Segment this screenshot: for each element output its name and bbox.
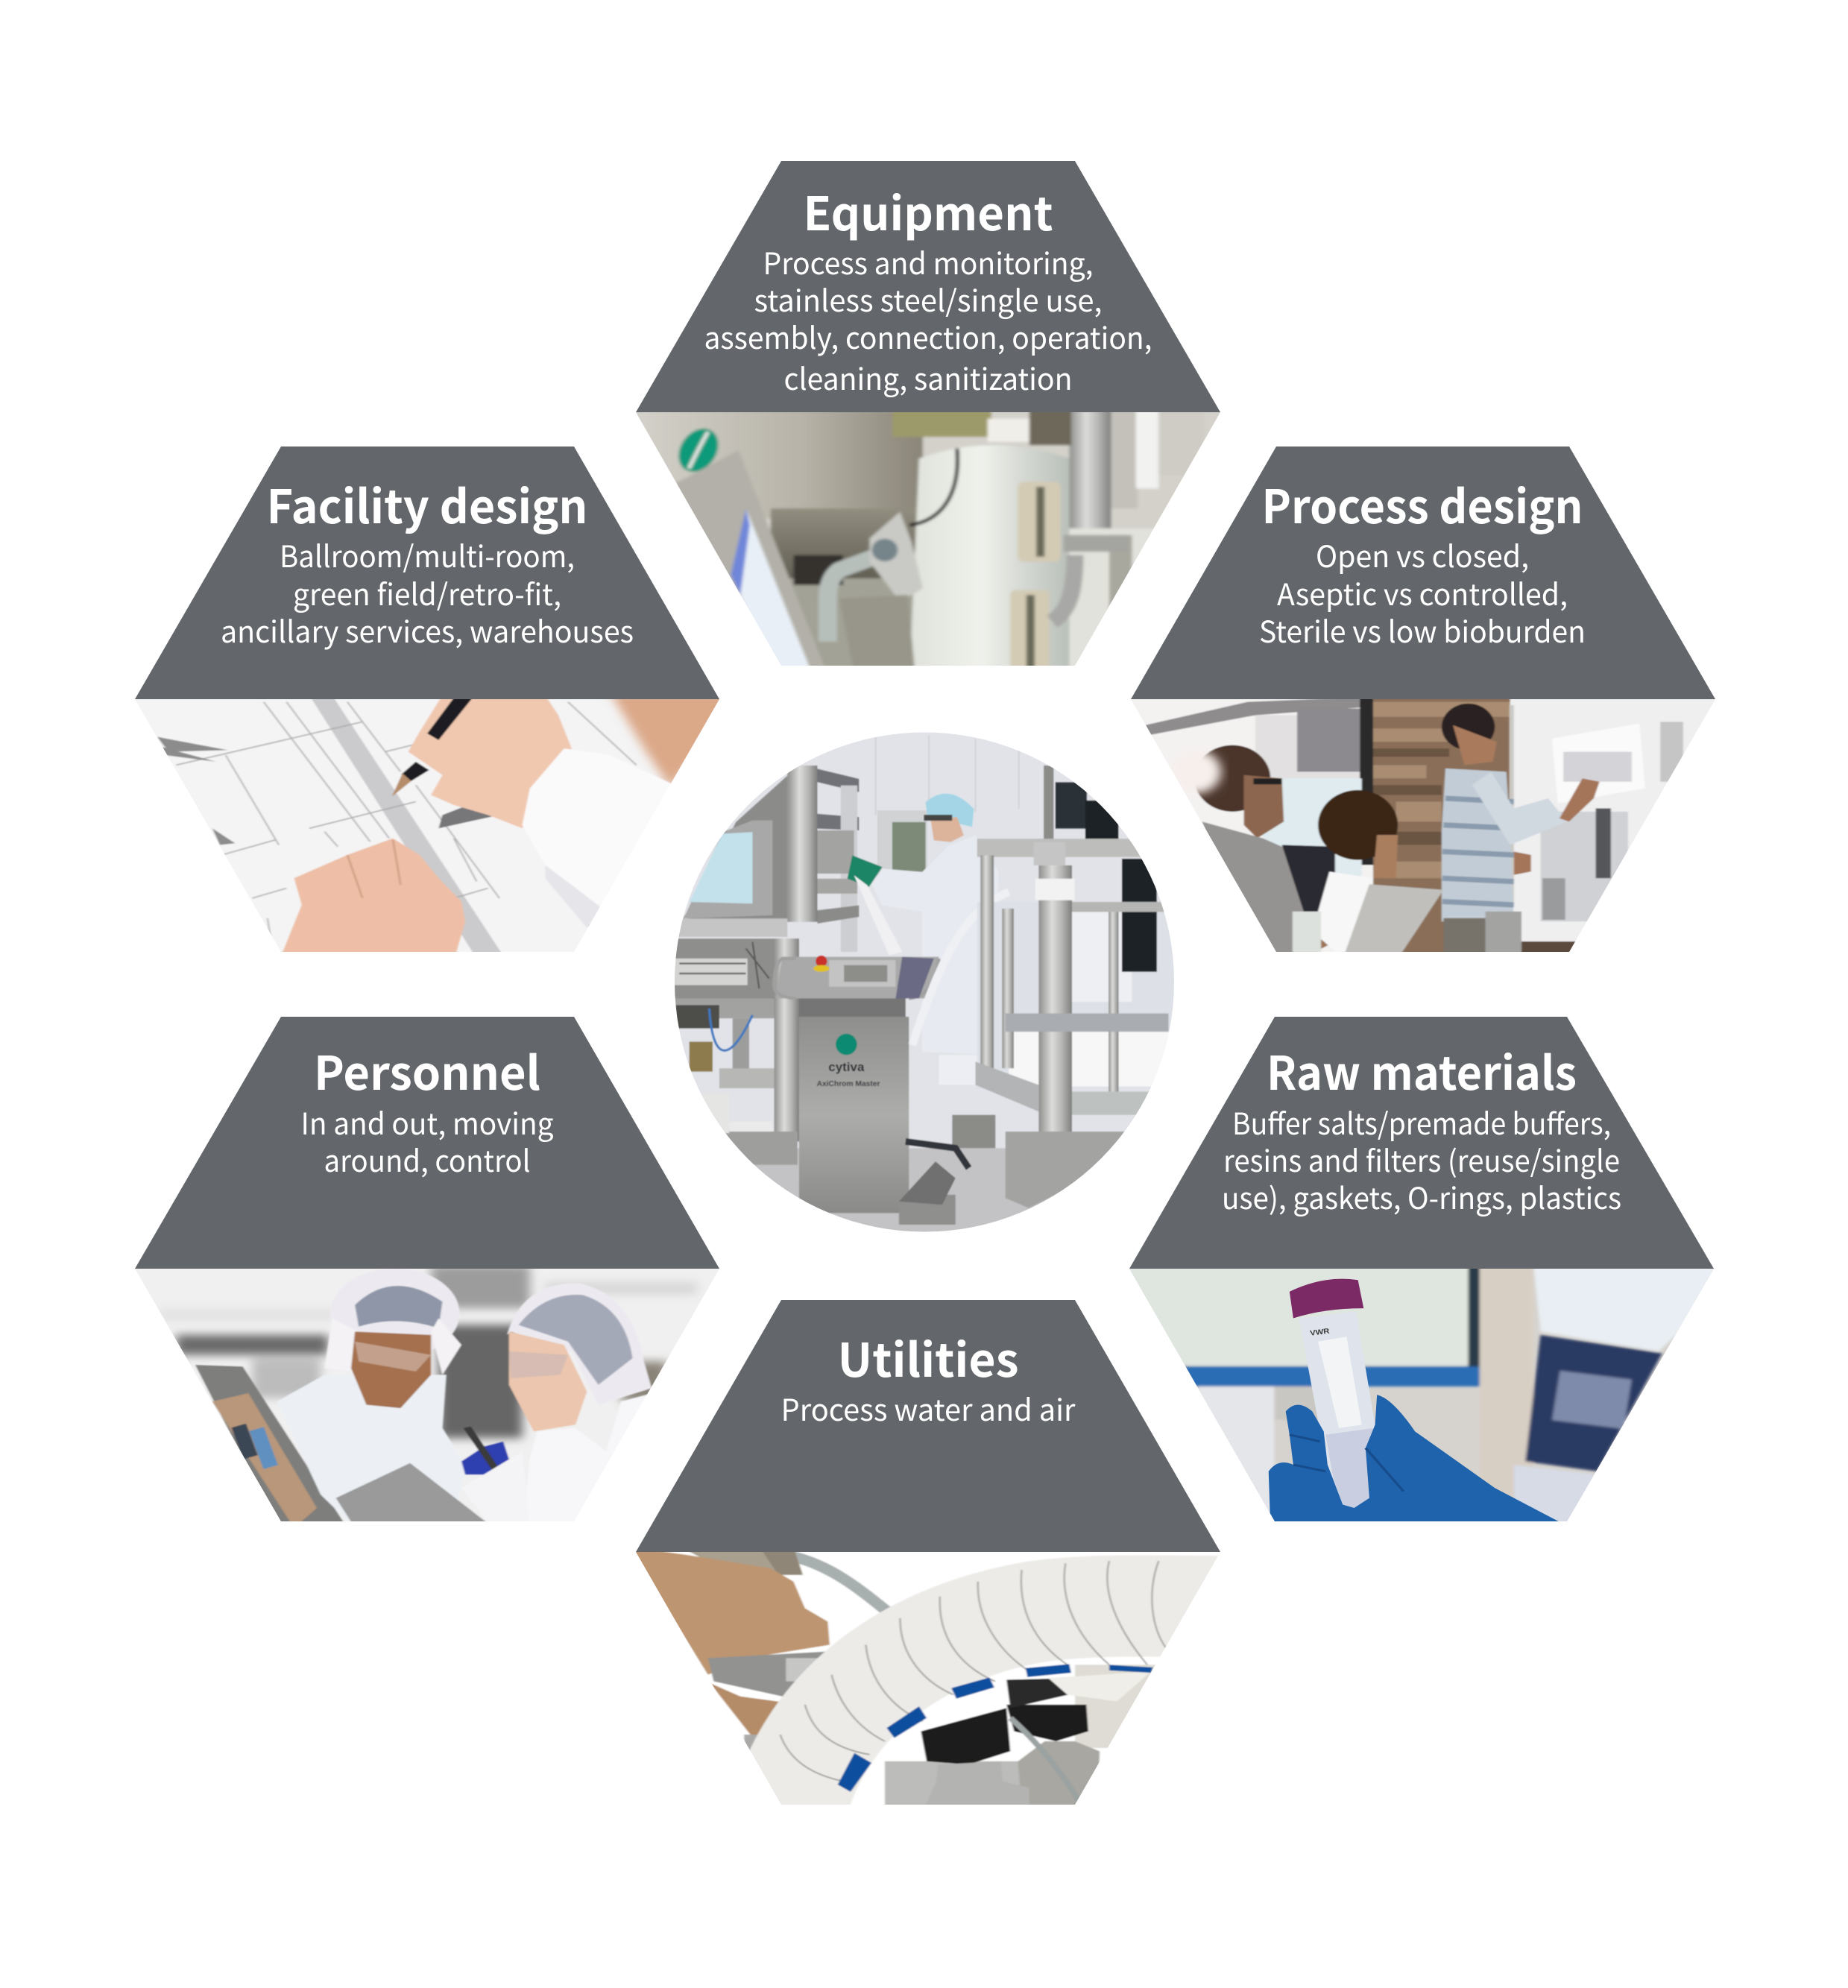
header hexagon: Facility design — [135, 446, 719, 699]
panel: Raw materials — [1103, 1017, 1727, 1528]
heading: Equipment: Equipment — [804, 177, 1053, 244]
text block: Personnel description — [301, 1100, 553, 1181]
photo: gloved hand holding sample tube — [1103, 1262, 1727, 1528]
text block: Process design description: Open vs closed, — [1316, 533, 1529, 576]
logo: cytiva on skid — [836, 1034, 857, 1055]
text block: Raw materials description: use), gaskets, O-rings, plastics — [1222, 1175, 1621, 1218]
photo: hands drawing on blueprint — [136, 699, 719, 952]
text block: Equipment description: stainless steel/single use, — [754, 277, 1102, 321]
text block: Personnel description: In and out, moving — [301, 1100, 553, 1143]
header hexagon: Utilities — [636, 1300, 1220, 1552]
text block: Utilities description: Process water and air — [781, 1386, 1076, 1430]
heading: Process design: Process design — [1261, 470, 1583, 537]
text block: Equipment description: Process and monitoring, — [763, 240, 1093, 283]
text block: Personnel description: around, control — [324, 1137, 531, 1181]
photo: two technicians in clean-room gowns — [135, 1269, 719, 1521]
text block: Raw materials description — [1222, 1100, 1621, 1218]
header hexagon: Raw materials — [1129, 1017, 1714, 1269]
photo: hand connecting white hose — [636, 1552, 1218, 1805]
tube label text: VWR — [1310, 1327, 1331, 1338]
central photo: technician at AxiChrom column: AxiChrom Master — [817, 1080, 880, 1088]
text block: Facility design description: Ballroom/multi-room, — [280, 533, 575, 576]
text block: Facility design description: green field/retro-fit, — [293, 571, 561, 614]
central photo: technician at AxiChrom column: cytiva — [828, 1060, 865, 1074]
panel: Personnel — [119, 1017, 735, 1531]
heading: Personnel: Personnel — [314, 1036, 540, 1103]
photo: chromatography equipment close-up — [636, 412, 1220, 666]
photo: team meeting at whiteboard — [1131, 699, 1715, 952]
header hexagon: Process design — [1131, 446, 1715, 699]
text block: Equipment description — [704, 240, 1152, 399]
header hexagon: Personnel — [135, 1017, 719, 1269]
heading: Facility design: Facility design — [267, 470, 587, 537]
text block: Process design description — [1259, 533, 1586, 651]
panel: Facility design — [119, 446, 735, 962]
text block: Equipment description: assembly, connection, operation, — [704, 315, 1152, 358]
text block: Process design description: Aseptic vs controlled, — [1277, 571, 1568, 614]
panel: Central photo of chromatography system — [675, 732, 1174, 1231]
text block: Equipment description: cleaning, sanitization — [784, 356, 1072, 399]
heading: Utilities: Utilities — [838, 1323, 1018, 1390]
text block: Raw materials description: Buffer salts/premade buffers, — [1232, 1100, 1611, 1143]
panel: Utilities — [619, 1300, 1234, 1821]
text block: Facility design description — [221, 533, 634, 651]
header hexagon: Equipment — [636, 161, 1220, 412]
panel: Equipment — [619, 161, 1234, 678]
central photo: technician at AxiChrom column — [675, 732, 1174, 1231]
heading: Raw materials: Raw materials — [1267, 1036, 1577, 1103]
text block: Process design description: Sterile vs low bioburden — [1259, 608, 1586, 651]
panel: Process design — [1103, 446, 1723, 962]
text block: Facility design description: ancillary services, warehouses — [221, 608, 634, 651]
text block: Raw materials description: resins and filters (reuse/single — [1223, 1137, 1620, 1181]
